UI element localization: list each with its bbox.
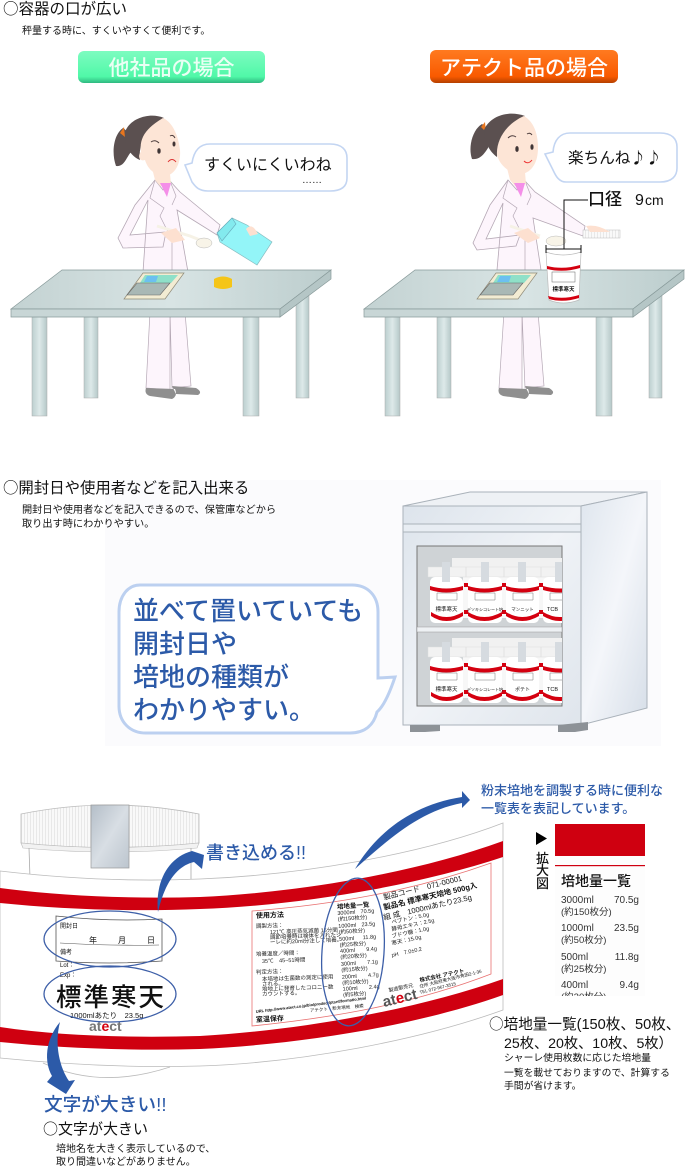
left speech bubble: すくいにくいわね [204,156,332,174]
description: amount list: シャーレ使用枚数に応じた培地量 [504,1051,651,1064]
medium amount list small: (約20枚分) [340,951,367,961]
upper shelf jars [428,562,576,623]
mouth diameter dimension: 口径 [588,190,622,209]
heading: amount list: ○培地量一覧(150枚、50枚、 [489,1013,680,1034]
medium amount list small: 7.1g [367,959,378,966]
enlarged list panel: 400ml [561,980,588,991]
jars on shelves [417,558,576,703]
usage text: URL http://www.atect.co.jp/bio/product/ptsnf/formatio.html [256,995,366,1014]
enlarged list panel: 1000ml [561,923,594,934]
medium amount list small: 300ml [341,961,356,968]
left person hair tie [120,127,125,137]
upper shelf jars: TCB [547,607,558,613]
enlarged list panel: 500ml [561,952,588,963]
upper shelf jars: 標準寒天 [435,605,458,613]
left person hair [125,116,164,160]
usage text: 調製方法： [256,921,284,930]
usage text: 本培地は生菌数の測定に使用 [262,973,334,983]
jar neck [29,848,191,880]
right table [364,270,684,416]
medium amount list small: 200ml [342,974,357,981]
description: amount list: 手間が省けます。 [504,1079,581,1092]
ellipse: write-in area [44,911,176,967]
medium amount list small: (約150枚分) [337,913,367,923]
medium amount list small: 23.5g [361,921,375,928]
medium amount list small: 培地量一覧 [337,900,370,911]
arrow to amount list callout [355,791,470,869]
enlarged list panel: (約150枚分) [561,906,612,918]
product information: 組 成 1000mlあたり23.5g [382,892,473,922]
product information: 酵母エキス：2.5g [391,917,435,933]
right person face [497,116,538,174]
section 2 description: 取り出す時にわかりやすい。 [22,518,154,530]
section 1 description: 秤量する時に、すくいやすくて便利です。 [22,24,210,37]
right person neck [507,168,526,186]
heading: amount list: 25枚、20枚、10枚、5枚） [504,1036,673,1052]
write-in box: 備考 [60,948,72,956]
product information: 製品名 標準寒天培地 500g入 [382,880,479,912]
button: atect [430,50,618,83]
atect logo small: atect [89,1018,122,1034]
usage text: 35℃ 45~51時間 [262,955,306,965]
callout: amount list: 粉末培地を調製する時に便利な [481,783,663,798]
left person face [139,118,180,176]
upper shelf jars: マンニット [511,607,534,613]
enlarged list panel [555,824,645,1003]
usage text: 判定方法： [256,967,284,976]
callout: large letters: 文字が大きい!! [44,1094,167,1115]
heading: amount list [489,1013,680,1052]
usage text: カウントする。 [262,989,301,998]
write-in box: 月 [118,936,126,945]
storage cabinet with jars [403,492,647,732]
write-in box: 開封日 [60,922,78,930]
product information: TEL 072-967-3515 [419,981,457,995]
lower red band [0,979,503,1050]
enlarged view marker [536,832,549,891]
section 2 description [22,503,276,530]
lower shelf jars [428,642,576,703]
right person spoon and hand [510,226,566,246]
enlarged view marker: 大 [536,863,549,878]
jar cap [21,805,199,852]
right person hair [484,114,525,157]
usage text: 培地上に発育したコロニー数 [262,982,334,993]
product information: ペプトン：5.0g [391,911,430,926]
large speech bubble: 開封日や [133,629,237,659]
back row caps [452,558,562,655]
right speech bubble [545,133,677,182]
write-in box: Lot： [60,963,74,969]
enlarged list panel: 培地量一覧 [561,873,631,889]
usage text [256,910,366,1024]
product information: 住所 大阪府東大阪市角田2-1-36 [419,968,483,990]
arrow to write-in callout [158,851,204,912]
usage text: 121℃ 高圧蒸気滅菌 15分間 [270,926,338,936]
cabinet top and side [403,492,647,725]
product information: 寒天：15.0g [391,933,422,947]
right person shirt [514,183,525,197]
enlarged list panel: 9.4g [620,980,639,991]
usage text: 使用方法 [256,910,284,920]
enlarged list panel: (約50枚分) [561,934,606,946]
product information: 製品コード 071-00001 [382,873,463,902]
product information: atect [381,986,419,1011]
jar base [43,1063,170,1078]
upper shelf jars: デソキシコレート培 [467,606,503,612]
write-in box: 日 [147,936,155,945]
product information: pH 7.0±0.2 [391,947,423,959]
lower shelf jars: TCB [547,687,558,693]
wide-mouth jar with label: 標準寒天 [552,285,575,293]
usage text: ーレに約20ml分注して培養。 [270,935,342,946]
cabinet window [417,546,562,706]
description: amount list: 一覧を載せておりますので、計算する [504,1066,670,1079]
right speech bubble: 楽ちんね♪♪ [568,146,662,168]
cyan narrow bottle [217,218,272,265]
medium amount list small: (約50枚分) [338,926,365,936]
medium amount list small: 1000ml [338,923,357,930]
medium amount list small [337,899,380,999]
right label border [252,863,491,1026]
medium amount list small: 3000ml [337,910,356,917]
right person ponytail [470,124,489,159]
culture medium name: 標準寒天 [56,984,166,1012]
section 2 backdrop [105,480,661,746]
back row red marks [464,583,544,694]
upper red band [0,841,503,910]
arrow to large letters callout [47,1022,75,1094]
description: amount list [504,1051,670,1092]
right person legs [498,312,553,399]
product information: 製造販売元 [388,982,414,994]
right scale tray [477,273,537,299]
left scene: person behind table [11,116,331,416]
enlarged list panel: 70.5g [614,895,639,906]
medium amount list small: 11.8g [363,934,376,941]
enlarged list panel: 11.8g [615,952,639,963]
large speech bubble: 培地の種類が [133,662,289,692]
large speech bubble: 並べて置いていても [133,596,363,626]
large speech bubble: わかりやすい。 [133,695,315,725]
enlarged list panel: (約20枚分) [561,991,606,1003]
right person coat [473,180,585,270]
label sheet [0,823,503,1067]
shelf [417,627,562,632]
medium amount list small: 4.7g [368,972,379,979]
amount per litre: 1000mlあたり 23.5g [70,1011,143,1020]
ellipse: amount list [317,876,389,1028]
enlarged list panel: (約25枚分) [561,963,606,975]
description: large letters [56,1142,215,1166]
left person ponytail [114,128,132,166]
right person hair tie [481,122,486,132]
medium amount list small: (約15枚分) [341,964,368,974]
enlarged list panel: 3000ml [561,895,594,906]
medium amount list small: (約10枚分) [342,977,369,987]
ellipse: medium name [44,966,176,1022]
heading: large letters: ○文字が大きい [43,1118,148,1139]
usage text: アテクト 粉末培地 検索 [310,1002,364,1014]
left person coat [118,180,220,272]
medium amount list small: (約5枚分) [343,989,367,999]
cabinet front [403,506,581,725]
yellow cap on table [214,276,232,289]
medium amount list small: 9.4g [366,946,377,953]
left scale tray [124,273,184,299]
section 2 heading: ○開封日や使用者などを記入出来る [3,476,249,498]
left person shirt [160,183,171,197]
usage text: 調節培養時は検体を入れたシ [270,931,342,941]
medium amount list small: 70.5g [360,908,375,915]
cabinet feet [410,722,588,732]
product information: ブドウ糖：1.0g [391,924,430,940]
mouth diameter dimension: cm [645,192,664,208]
left speech bubble: …… [302,175,322,186]
jar close-up [0,805,503,1078]
product information [381,873,483,1011]
right scene: person behind table [364,114,684,416]
left person legs [146,312,200,399]
button: other company [78,51,265,83]
wide-mouth jar with label [546,252,581,303]
callout: amount list [481,783,663,816]
left table [11,270,331,416]
callout: amount list: 一覧表を表記しています。 [481,801,635,816]
button: atect: アテクト品の場合 [440,57,608,80]
lower shelf jars: ポテト [515,686,530,693]
usage text: される。 [262,980,284,988]
product information: 株式会社 アテクト [419,967,465,984]
left person spoon and hand [157,226,212,248]
write-in box: Exp： [60,973,76,979]
usage text: 室温保存 [256,1014,284,1024]
mouth diameter dimension [546,190,664,253]
left speech bubble [185,144,347,191]
lid and hand [583,226,620,238]
back row bodies [463,577,547,698]
write-in box [56,916,162,979]
left person collar lines [150,180,176,272]
enlarged view marker: 図 [536,876,549,891]
left person expression [151,135,176,162]
medium amount list small: 500ml [339,936,354,943]
enlarged list panel: 23.5g [614,923,639,934]
medium amount list small: (約25枚分) [339,939,366,949]
left person neck [152,168,171,186]
medium amount list small: 2.4g [369,984,380,991]
description: large letters: 培地名を大きく表示しているので、 [56,1142,215,1155]
button: other company: 他社品の場合 [108,57,234,80]
enlarged view marker: 拡 [536,851,549,866]
right person expression [508,133,533,163]
section 2 description: 開封日や使用者などを記入できるので、保管庫などから [22,503,276,516]
lower shelf jars: 標準寒天 [435,685,458,693]
large speech bubble [119,585,395,733]
write-in box: 年 [89,935,97,945]
tamper seal [91,805,129,868]
lower shelf jars: デソキシコレート培 [467,686,503,692]
usage text: 培養温度／時間： [256,948,300,958]
mouth diameter dimension: 9 [635,192,644,209]
right person collar lines [503,180,531,270]
medium amount list small: 100ml [343,986,358,993]
medium amount list small: 400ml [340,948,355,955]
callout: writable: 書き込める!! [206,843,306,863]
